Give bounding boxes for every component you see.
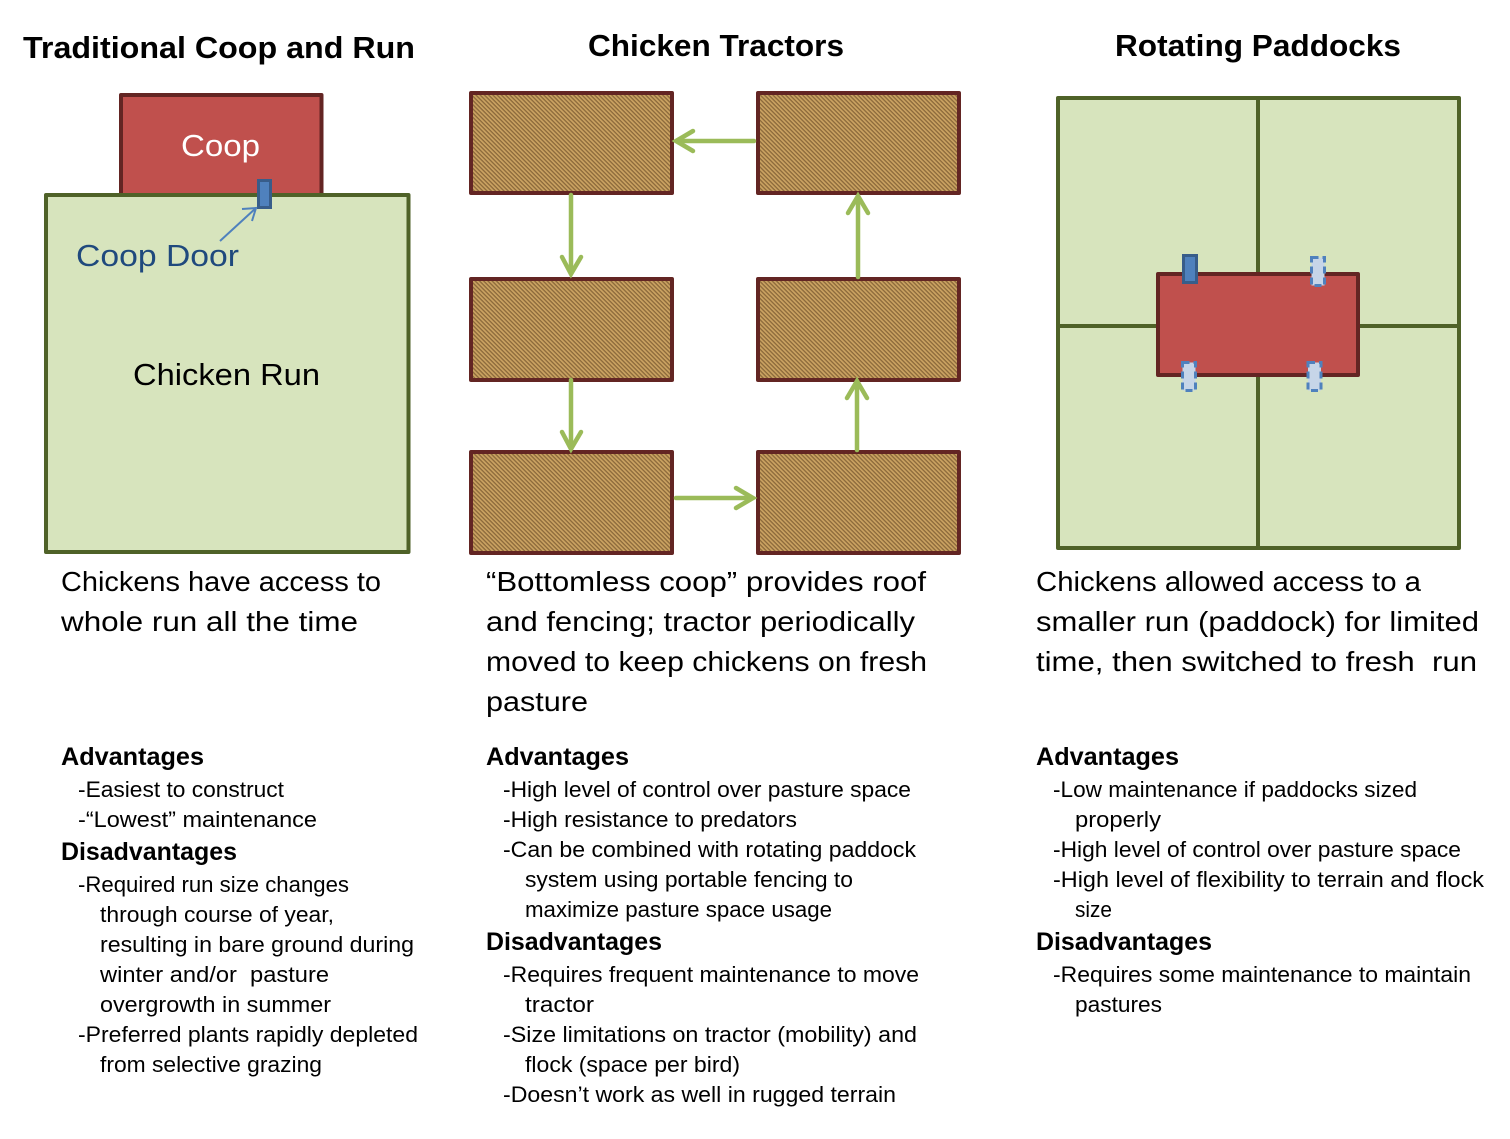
disadvantages: traditional: overgrowth in summer bbox=[100, 992, 332, 1017]
description: traditional bbox=[60, 566, 381, 637]
description: paddocks bbox=[1036, 566, 1479, 677]
advantages: traditional bbox=[61, 743, 317, 832]
disadvantages: paddocks: -Requires some maintenance to maintain bbox=[1053, 962, 1471, 987]
advantages: traditional: Advantages bbox=[61, 743, 204, 771]
description: tractors bbox=[486, 566, 927, 717]
description: traditional: Chickens have access to bbox=[61, 566, 381, 597]
advantages: tractors: -High level of control over pasture space bbox=[503, 777, 911, 802]
advantages: tractors bbox=[486, 743, 917, 922]
coop door bbox=[258, 180, 270, 208]
advantages: tractors: maximize pasture space usage bbox=[525, 897, 832, 922]
advantages: tractors: Advantages bbox=[486, 743, 629, 771]
disadvantages: tractors: -Doesn’t work as well in rugged terrain bbox=[503, 1082, 896, 1107]
description: tractors: pasture bbox=[486, 686, 588, 717]
advantages: paddocks: -High level of flexibility to terrain and flock bbox=[1053, 867, 1485, 892]
disadvantages: paddocks: pastures bbox=[1075, 992, 1162, 1017]
movement arrows bbox=[562, 131, 868, 508]
coop building: Coop bbox=[181, 128, 260, 163]
chicken run bbox=[46, 195, 408, 552]
disadvantages: tractors: -Size limitations on tractor (mobility) and bbox=[503, 1022, 917, 1047]
description: tractors: “Bottomless coop” provides roof bbox=[486, 566, 926, 597]
arrow: to coop door bbox=[220, 208, 256, 241]
description: traditional: whole run all the time bbox=[60, 606, 358, 637]
disadvantages: traditional: -Required run size changes bbox=[78, 872, 349, 897]
panel: rotating paddocks bbox=[1036, 28, 1485, 1017]
disadvantages: traditional: -Preferred plants rapidly depleted bbox=[78, 1022, 418, 1047]
description: paddocks: time, then switched to fresh run bbox=[1036, 646, 1477, 677]
disadvantages: traditional: resulting in bare ground during bbox=[100, 932, 414, 957]
description: tractors: and fencing; tractor periodically bbox=[486, 606, 915, 637]
disadvantages: traditional: through course of year, bbox=[100, 902, 334, 927]
advantages: traditional: -“Lowest” maintenance bbox=[78, 807, 317, 832]
chicken run: Chicken Run bbox=[133, 357, 320, 392]
heading: traditional coop and run: Traditional Coop and Run bbox=[23, 30, 415, 65]
panel: traditional coop and run bbox=[23, 30, 418, 1077]
central coop bbox=[1158, 274, 1358, 375]
coop building bbox=[121, 95, 322, 195]
diagram: paddocks bbox=[1058, 98, 1459, 548]
advantages: paddocks: -Low maintenance if paddocks sized bbox=[1053, 777, 1417, 802]
disadvantages: traditional: from selective grazing bbox=[100, 1052, 322, 1077]
disadvantages: tractors: flock (space per bird) bbox=[525, 1052, 740, 1077]
paddock grid bbox=[1058, 98, 1459, 548]
advantages: tractors: system using portable fencing to bbox=[525, 867, 853, 892]
description: tractors: moved to keep chickens on fresh bbox=[486, 646, 927, 677]
disadvantages: traditional: winter and/or pasture bbox=[99, 962, 329, 987]
open door bbox=[1184, 256, 1196, 282]
disadvantages: traditional: Disadvantages bbox=[61, 838, 237, 866]
disadvantages: tractors: Disadvantages bbox=[486, 928, 662, 956]
advantages: traditional: -Easiest to construct bbox=[78, 777, 285, 802]
advantages: tractors: -Can be combined with rotating paddock bbox=[503, 837, 917, 862]
heading: chicken tractors: Chicken Tractors bbox=[588, 28, 844, 63]
label: coop door: Coop Door bbox=[76, 238, 239, 273]
closed doors bbox=[1182, 258, 1324, 390]
description: paddocks: Chickens allowed access to a bbox=[1036, 566, 1421, 597]
disadvantages: tractors: tractor bbox=[525, 992, 595, 1017]
advantages: paddocks: -High level of control over pasture space bbox=[1053, 837, 1461, 862]
advantages: paddocks: Advantages bbox=[1036, 743, 1179, 771]
panel: chicken tractors bbox=[471, 28, 959, 1107]
advantages: paddocks bbox=[1036, 743, 1485, 922]
disadvantages: paddocks: Disadvantages bbox=[1036, 928, 1212, 956]
advantages: tractors: -High resistance to predators bbox=[503, 807, 797, 832]
tractor position boxes bbox=[471, 93, 959, 553]
advantages: paddocks: size bbox=[1075, 897, 1112, 922]
diagram: tractor positions bbox=[471, 93, 959, 553]
description: paddocks: smaller run (paddock) for limited bbox=[1036, 606, 1479, 637]
disadvantages: paddocks bbox=[1036, 928, 1471, 1017]
advantages: paddocks: properly bbox=[1075, 807, 1162, 832]
disadvantages: tractors bbox=[486, 928, 919, 1107]
disadvantages: traditional bbox=[61, 838, 418, 1077]
diagram: coop and run bbox=[46, 95, 408, 552]
heading: rotating paddocks: Rotating Paddocks bbox=[1115, 28, 1401, 63]
disadvantages: tractors: -Requires frequent maintenance to move bbox=[503, 962, 919, 987]
